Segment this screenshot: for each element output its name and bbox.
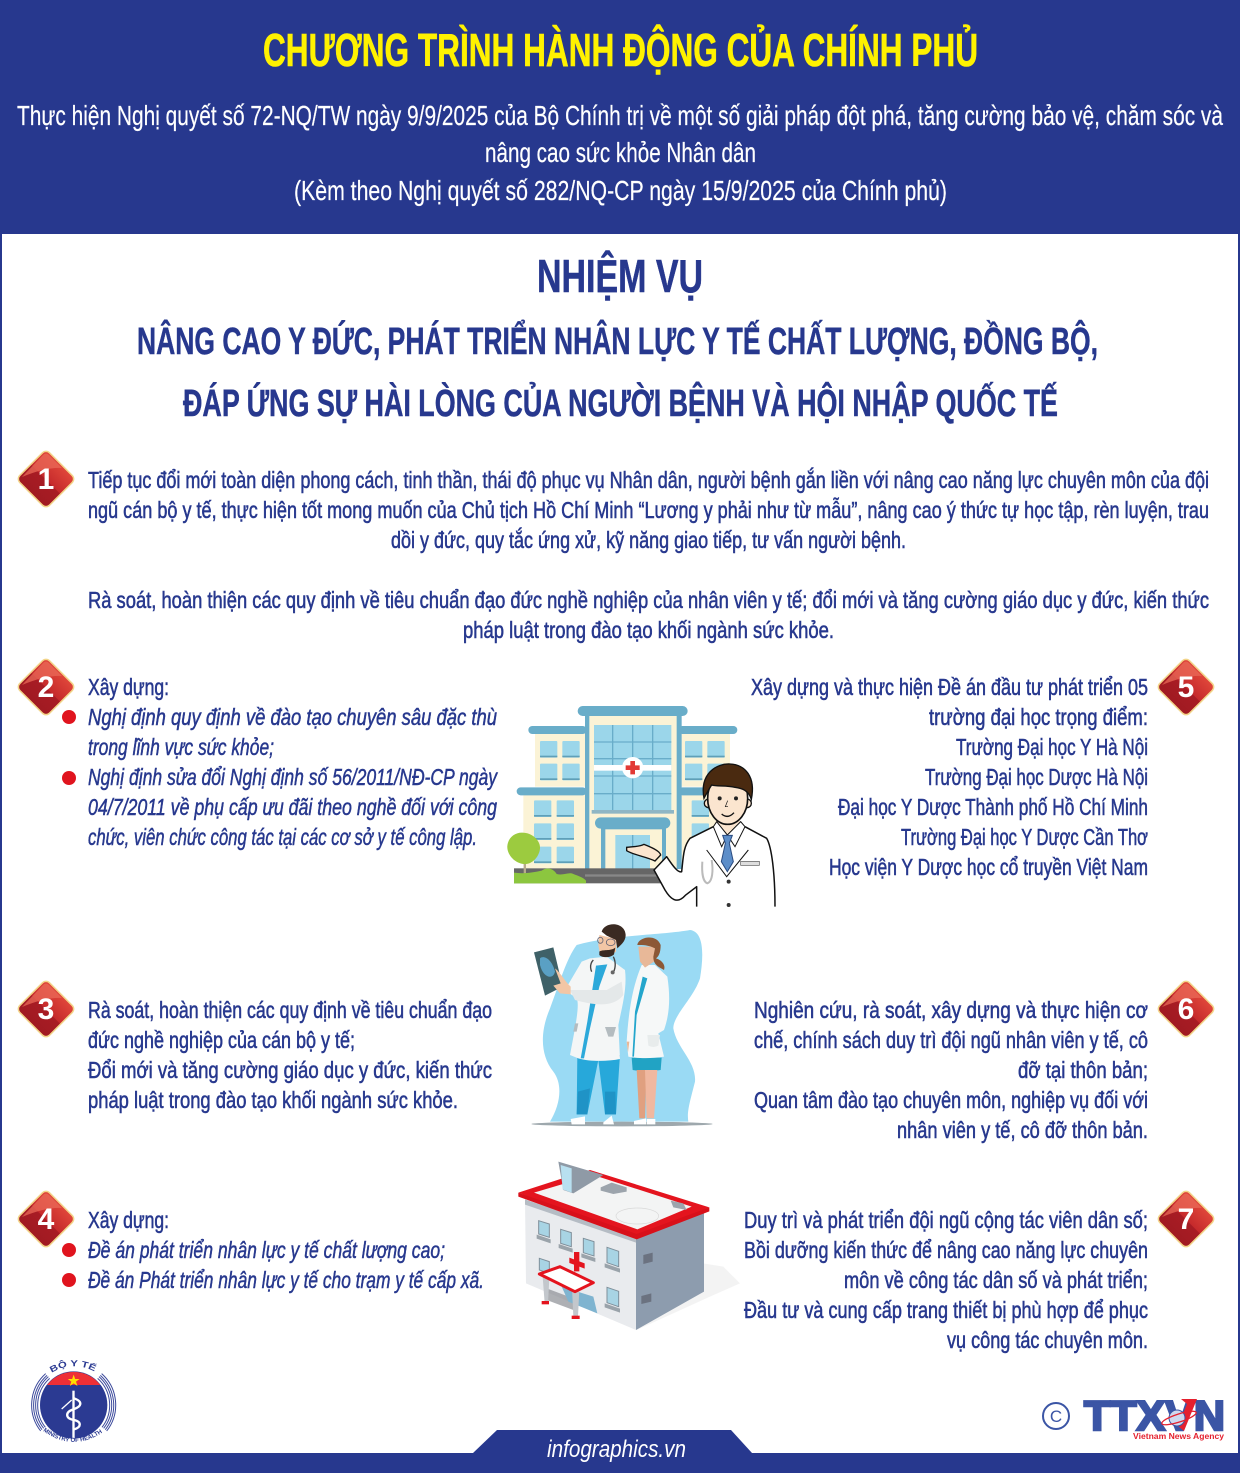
copyright symbol	[1043, 1403, 1069, 1429]
text block 1	[88, 467, 1209, 643]
logo: ministry of health: MINISTRY OF HEALTH	[43, 1428, 102, 1442]
subtitle: (Kèm theo Nghị quyết số 282/NQ-CP ngày 15/9/2025 của Chính phủ)	[294, 175, 947, 206]
text block 4: Đề án Phát triển nhân lực y tế cho trạm y tế cấp xã.	[88, 1267, 484, 1293]
badge 2: 2	[38, 671, 54, 704]
text block 5: Học viện Y Dược học cổ truyền Việt Nam	[829, 854, 1148, 880]
text block 6	[754, 997, 1148, 1143]
logo: ministry of health	[31, 1360, 116, 1442]
text block 5: Trường Đại học Dược Hà Nội	[925, 764, 1148, 790]
text block 5: Trường Đại học Y Hà Nội	[956, 734, 1148, 760]
illustration: hospital with doctor	[507, 706, 775, 907]
text block 6: nhân viên y tế, cô đỡ thôn bản.	[897, 1117, 1148, 1143]
badge 3: 3	[38, 993, 54, 1026]
badge 2	[16, 657, 76, 717]
text block 3	[88, 997, 492, 1113]
website: infographics.vn	[547, 1436, 686, 1463]
text block 5: Đại học Y Dược Thành phố Hồ Chí Minh	[838, 794, 1148, 820]
text block 7: vụ công tác chuyên môn.	[947, 1327, 1148, 1353]
illustration: two doctors	[531, 924, 713, 1126]
heading: nhiệm vụ: NHIỆM VỤ	[537, 250, 703, 302]
text block 7	[744, 1207, 1148, 1353]
text block 2: Nghị định sửa đổi Nghị định số 56/2011/NĐ-CP ngày	[88, 764, 498, 790]
badge 7	[1156, 1189, 1216, 1249]
badge 4: 4	[38, 1203, 55, 1236]
text block 3: Đổi mới và tăng cường giáo dục y đức, kiến thức	[88, 1057, 492, 1083]
text block 1: pháp luật trong đào tạo khối ngành sức khỏe.	[463, 617, 834, 643]
badge 3	[16, 979, 76, 1039]
text block 4: Đề án phát triển nhân lực y tế chất lượng cao;	[88, 1237, 445, 1263]
badge 5: 5	[1178, 671, 1194, 704]
text block 7: môn về công tác dân số và phát triển;	[844, 1267, 1148, 1293]
logo: ministry of health: BỘ Y TẾ	[50, 1360, 97, 1372]
text block 2	[62, 674, 498, 850]
subtitle: nâng cao sức khỏe Nhân dân	[485, 137, 756, 168]
text block 2: Xây dựng:	[88, 674, 169, 700]
badge 6: 6	[1178, 993, 1194, 1026]
badge 6	[1156, 979, 1216, 1039]
subtitle	[17, 100, 1223, 206]
logo: TTXVN: TTXVN	[1084, 1392, 1225, 1439]
text block 6: đỡ tại thôn bản;	[1018, 1057, 1148, 1083]
badge 4	[16, 1189, 76, 1249]
badge 1	[16, 449, 76, 509]
header band	[0, 0, 1240, 234]
text block 1: dồi y đức, quy tắc ứng xử, kỹ năng giao tiếp, tư vấn người bệnh.	[391, 527, 906, 553]
text block 2: 04/7/2011 về phụ cấp ưu đãi theo nghề đối với công	[88, 794, 497, 820]
text block 6: chế, chính sách duy trì đội ngũ nhân viên y tế, cô	[754, 1027, 1148, 1053]
text block 2: trong lĩnh vực sức khỏe;	[88, 734, 274, 760]
badge 1: 1	[38, 463, 54, 496]
text block 3: đức nghề nghiệp của cán bộ y tế;	[88, 1027, 355, 1053]
badge 7: 7	[1178, 1203, 1194, 1236]
text block 5: trường đại học trọng điểm:	[929, 704, 1148, 730]
illustration: clinic building	[518, 1162, 740, 1330]
text block 6: Nghiên cứu, rà soát, xây dựng và thực hiện cơ	[754, 997, 1148, 1023]
text block 2: Nghị định quy định về đào tạo chuyên sâu đặc thù	[88, 704, 497, 730]
text block 3: pháp luật trong đào tạo khối ngành sức khỏe.	[88, 1087, 458, 1113]
text block 7: Duy trì và phát triển đội ngũ cộng tác viên dân số;	[744, 1207, 1148, 1233]
text block 4	[62, 1207, 484, 1293]
text block 5	[751, 674, 1148, 880]
badge 5	[1156, 657, 1216, 717]
footer band	[0, 1430, 1240, 1473]
text block 3: Rà soát, hoàn thiện các quy định về tiêu chuẩn đạo	[88, 997, 492, 1023]
text block 4: Xây dựng:	[88, 1207, 169, 1233]
heading: nhiệm vụ	[137, 250, 1098, 425]
copyright symbol: C	[1050, 1407, 1062, 1426]
logo: TTXVN: Vietnam News Agency	[1133, 1431, 1224, 1441]
text block 5: Trường Đại học Y Dược Cần Thơ	[901, 824, 1148, 850]
text block 2: chức, viên chức công tác tại các cơ sở y tế công lập.	[88, 824, 477, 850]
